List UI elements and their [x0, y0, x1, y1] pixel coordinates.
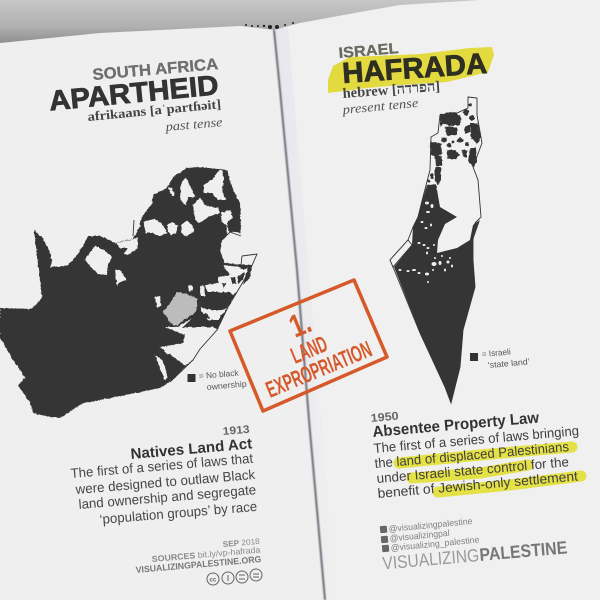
land and holes: [0, 167, 252, 418]
stamp border: [230, 280, 387, 411]
right page: [274, 0, 600, 600]
Gaza outline: [390, 240, 412, 267]
description: under Israeli state control for the: [376, 454, 570, 486]
legend: Israeli state land: ‘state land’: [487, 356, 530, 370]
law name: Absentee Property Law: [372, 409, 541, 441]
stamp number: 1.: [284, 304, 316, 344]
logo: Visualizing Palestine: [382, 537, 568, 573]
icons: creative commons: [207, 569, 262, 585]
logo: Visualizing Palestine: VISUALIZING: [382, 545, 480, 573]
stamp word: expropriation: EXPROPRIATION: [262, 336, 375, 403]
description: benefit of Jewish-only settlement: [377, 469, 579, 501]
left page: [0, 26, 325, 600]
legend: No black ownership: = No black: [198, 367, 240, 381]
credits: date and sources: VISUALIZINGPALESTINE.ORG: [135, 554, 262, 575]
credits: date and sources: SEP 2018: [222, 537, 261, 549]
legend: Israeli state land: [470, 346, 530, 370]
description: ‘population groups’ by race: [99, 499, 258, 527]
heading: South Africa: SOUTH AFRICA: [92, 56, 219, 84]
legend: Israeli state land: = Israeli: [481, 346, 511, 359]
social media handles: [380, 516, 480, 553]
credits: date and sources: SOURCES bit.ly/vp-hafrada: [151, 545, 261, 564]
book spine: [274, 30, 325, 600]
handles: @visualizingpalestine: [388, 516, 473, 534]
left column: South Africa title block: [48, 56, 223, 134]
map: Israel state land: [390, 97, 482, 403]
social icons: [380, 526, 389, 552]
tense label: past tense: [164, 114, 223, 134]
heading: Israel: ISRAEL: [338, 40, 399, 62]
yellow highlight: [328, 47, 494, 93]
heading: Hafrada: HAFRADA: [341, 48, 488, 90]
northern mottled patches: [424, 104, 481, 197]
white settlement specks: [398, 202, 453, 283]
text block: Natives Land Act: [70, 424, 258, 527]
credits: date and sources: [135, 537, 262, 575]
stamp word: land: LAND: [287, 330, 331, 369]
description: land ownership and segregate: [78, 482, 257, 512]
year: 1950: [370, 411, 399, 425]
legend: No black ownership: [188, 367, 247, 392]
description: The first of a series of laws that: [70, 451, 254, 481]
description: [70, 451, 258, 527]
right column: Israel title block: [328, 40, 494, 117]
icons: creative commons: cc: [210, 578, 217, 584]
handles: @visualizingpal: [389, 528, 450, 543]
Lesotho: [163, 292, 197, 326]
map: South Africa: [0, 167, 257, 418]
handles: @visualizing_palestine: [390, 535, 480, 553]
heading: Apartheid: APARTHEID: [48, 69, 220, 116]
borders: [133, 220, 257, 382]
description: the land of displaced Palestinians: [374, 439, 570, 471]
text highlights: [399, 447, 581, 492]
description: [373, 423, 579, 501]
pronunciation: afrikaans [aˈpartɦəit]: [87, 96, 222, 124]
law name: Natives Land Act: [130, 435, 253, 463]
southern state land: [394, 186, 480, 403]
tense label: present tense: [341, 95, 419, 117]
stamp: land expropriation: [230, 280, 387, 411]
year: 1913: [222, 424, 250, 438]
legend: No black ownership: ownership: [206, 379, 247, 392]
handles: [388, 516, 480, 553]
description: The first of a series of laws bringing: [373, 423, 579, 456]
text block: Absentee Property Law: [370, 409, 581, 501]
description: were designed to outlaw Black: [74, 467, 256, 497]
outline of territory: [390, 97, 482, 403]
pronunciation: hebrew [הפרדה]: [342, 79, 441, 102]
logo: Visualizing Palestine: PALESTINE: [479, 537, 568, 565]
